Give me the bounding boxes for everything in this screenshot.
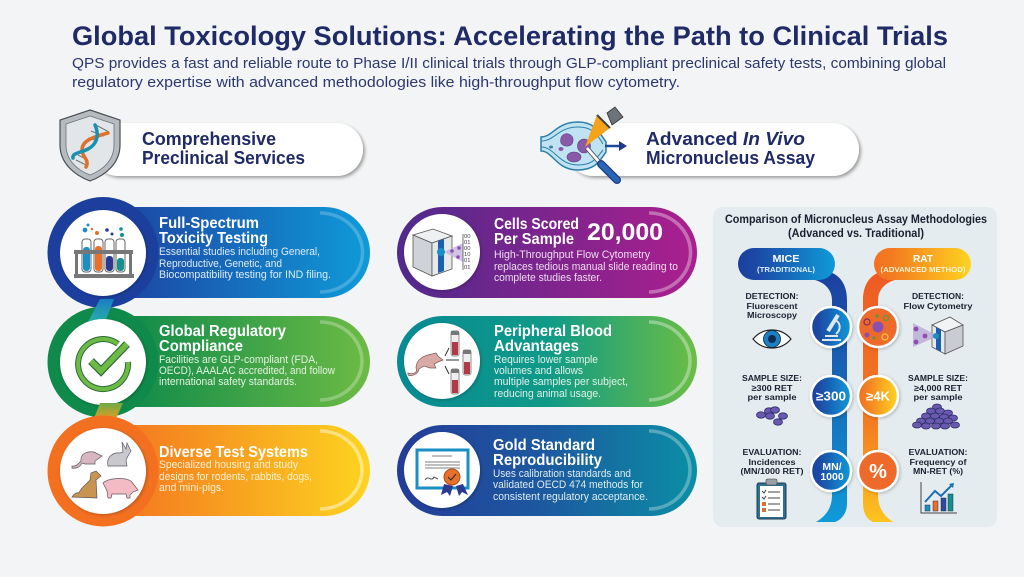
card text: volumes and allows — [494, 365, 584, 377]
connector ribbon: blue to green — [88, 299, 114, 322]
card text: Full-Spectrum — [159, 215, 259, 232]
row: detection, traditional label: Microscopy — [747, 310, 797, 320]
section header pill — [567, 123, 859, 176]
row: sample size, advanced label: per sample — [914, 392, 963, 402]
pill: rat advanced method — [874, 248, 971, 280]
row: evaluation, advanced label — [908, 447, 968, 476]
card text: and mini-pigs. — [159, 482, 224, 494]
ribbon: traditional — [815, 271, 847, 522]
section header pill: Advanced In Vivo — [646, 128, 805, 149]
row: sample size, traditional label: ≥300 RET — [752, 383, 793, 393]
icon: check mark — [78, 339, 128, 389]
icon: test tubes — [74, 224, 134, 278]
card: cells scored per sample — [397, 207, 697, 298]
card text: replaces tedious manual slide reading to — [494, 261, 678, 273]
icon: test animals — [72, 442, 138, 498]
card text: Reproducibility — [493, 452, 602, 469]
card text: 20,000 — [587, 219, 663, 246]
pill: rat advanced method: (ADVANCED METHOD) — [880, 265, 966, 274]
icon: growth chart — [921, 482, 957, 513]
card text: Gold Standard — [493, 437, 595, 454]
row: detection, advanced label — [904, 291, 973, 311]
card: gold standard reproducibility — [397, 425, 697, 516]
badge: percent: % — [869, 461, 887, 483]
row: sample size, advanced label: SAMPLE SIZE: — [908, 373, 968, 383]
badge: MN/1000 — [811, 451, 851, 491]
subtitle — [72, 55, 946, 91]
badge: 300 — [811, 376, 851, 416]
card text: Peripheral Blood — [494, 323, 612, 340]
pill: rat advanced method: RAT — [913, 253, 934, 265]
row: evaluation, advanced label: Frequency of — [910, 457, 967, 467]
row: evaluation, advanced label: MN-RET (%) — [913, 466, 963, 476]
card text: Diverse Test Systems — [159, 444, 308, 461]
section header pill: Micronucleus Assay — [646, 147, 816, 168]
title: Global Toxicology Solutions: Accelerating the Path to Clinical Trials — [72, 21, 948, 51]
icon: flow cytometer: 10 — [464, 252, 470, 258]
badge: microscope — [811, 307, 851, 347]
card text: Requires lower sample — [494, 354, 598, 366]
subtitle: regulatory expertise with advanced methodologies like high-throughput flow cytometry. — [72, 74, 680, 91]
comparison heading — [725, 214, 987, 240]
row: evaluation, advanced label: EVALUATION: — [908, 447, 968, 457]
card text: consistent regulatory acceptance. — [493, 491, 648, 503]
ribbon: advanced — [863, 271, 895, 522]
card text: Global Regulatory — [159, 323, 286, 340]
row: evaluation, traditional label: (MN/1000 RET) — [740, 466, 804, 476]
card text: Uses calibration standards and — [493, 468, 631, 480]
card text: reducing animal usage. — [494, 388, 601, 400]
card text — [159, 215, 331, 281]
icon: flow cytometer: 01 — [464, 258, 470, 264]
icon: flow cytometer: 01 — [464, 265, 470, 271]
pill: mice traditional: MICE — [772, 253, 800, 265]
row: evaluation, traditional label: Incidences — [748, 457, 796, 467]
panel: advanced in vivo micronucleus assay — [397, 107, 859, 516]
icon: rat and blood tubes — [408, 331, 471, 394]
section header pill: Comprehensive — [142, 128, 276, 149]
panel: comprehensive preclinical services — [48, 110, 370, 526]
row: sample size, advanced label: ≥4,000 RET — [914, 383, 963, 393]
icon: many cells — [912, 404, 960, 429]
card text: multiple samples per subject, — [494, 376, 628, 388]
row: sample size, traditional label: per sample — [748, 392, 797, 402]
card text: Toxicity Testing — [159, 230, 268, 247]
comparison heading: Comparison of Micronucleus Assay Methodologies — [725, 214, 987, 226]
card text: OECD), AAALAC accredited, and follow — [159, 365, 335, 377]
icon: flow cytometer: 00 — [464, 246, 470, 252]
card text: High-Throughput Flow Cytometry — [494, 249, 651, 261]
card text — [159, 323, 335, 388]
row: detection, advanced label: DETECTION: — [912, 291, 964, 301]
row: detection, traditional label: DETECTION: — [746, 291, 799, 301]
section header pill — [92, 123, 363, 176]
pill: mice traditional — [738, 248, 835, 280]
card: global regulatory compliance — [48, 299, 370, 418]
card text: international safety standards. — [159, 376, 297, 388]
icon: flow cytometer small — [913, 317, 963, 354]
card: diverse test systems — [48, 403, 370, 526]
pill: mice traditional: (TRADITIONAL) — [757, 265, 816, 274]
row: sample size, traditional label: SAMPLE SIZE: — [742, 373, 802, 383]
icon: flow cytometer: 01 — [464, 240, 470, 246]
card: full-spectrum toxicity testing — [48, 197, 370, 308]
card text — [159, 444, 312, 494]
icon: clipboard — [757, 479, 786, 519]
card text: Advantages — [494, 338, 579, 355]
panel: comparison of micronucleus assay methodologies — [713, 207, 997, 527]
card text — [494, 216, 678, 284]
row: detection, traditional label: Fluorescent — [746, 301, 798, 311]
card text: complete studies faster. — [494, 272, 602, 284]
badge: 300: ≥300 — [816, 390, 846, 404]
icon: flow cytometer: 00 — [464, 234, 470, 240]
badge: percent — [858, 451, 898, 491]
row: detection, traditional label — [746, 291, 799, 320]
card text: Reproductive, Genetic, and — [159, 258, 282, 270]
badge: MN/1000: MN/ — [822, 461, 842, 473]
row: sample size, traditional label — [742, 373, 802, 402]
card text: validated OECD 474 methods for — [493, 479, 643, 491]
icon: flow cell with laser — [541, 107, 627, 180]
row: evaluation, traditional label: EVALUATION: — [742, 447, 802, 457]
comparison heading: (Advanced vs. Traditional) — [788, 228, 924, 240]
card text: Compliance — [159, 338, 243, 355]
badge: 4K — [858, 376, 898, 416]
icon: certificate — [417, 450, 468, 496]
row: detection, advanced label: Flow Cytometry — [904, 301, 973, 311]
card text: Specialized housing and study — [159, 459, 299, 471]
row: sample size, advanced label — [908, 373, 968, 402]
icon: DNA shield — [60, 110, 120, 181]
card text — [493, 437, 648, 503]
card text: Per Sample — [494, 231, 574, 248]
card text: Biocompatibility testing for IND filing. — [159, 269, 331, 281]
icon: flow cytometer — [413, 229, 470, 276]
badge: 4K: ≥4K — [866, 390, 890, 404]
section header pill: Preclinical Services — [142, 147, 305, 168]
card text — [494, 323, 628, 400]
badge: flow cells — [858, 307, 898, 347]
card: peripheral blood advantages — [397, 316, 697, 407]
badge: MN/1000: 1000 — [820, 471, 844, 483]
row: evaluation, traditional label — [740, 447, 804, 476]
card text: Cells Scored — [494, 216, 579, 233]
card text: Facilities are GLP-compliant (FDA, — [159, 354, 318, 366]
icon: eye — [753, 330, 791, 348]
icon: few cells — [756, 407, 788, 425]
card text: designs for rodents, rabbits, dogs, — [159, 471, 312, 483]
card text: Essential studies including General, — [159, 246, 320, 258]
connector ribbon: green to orange — [93, 403, 123, 421]
subtitle: QPS provides a fast and reliable route to Phase I/II clinical trials through GLP-compliant preclinical safety tests, combining global — [72, 55, 946, 72]
